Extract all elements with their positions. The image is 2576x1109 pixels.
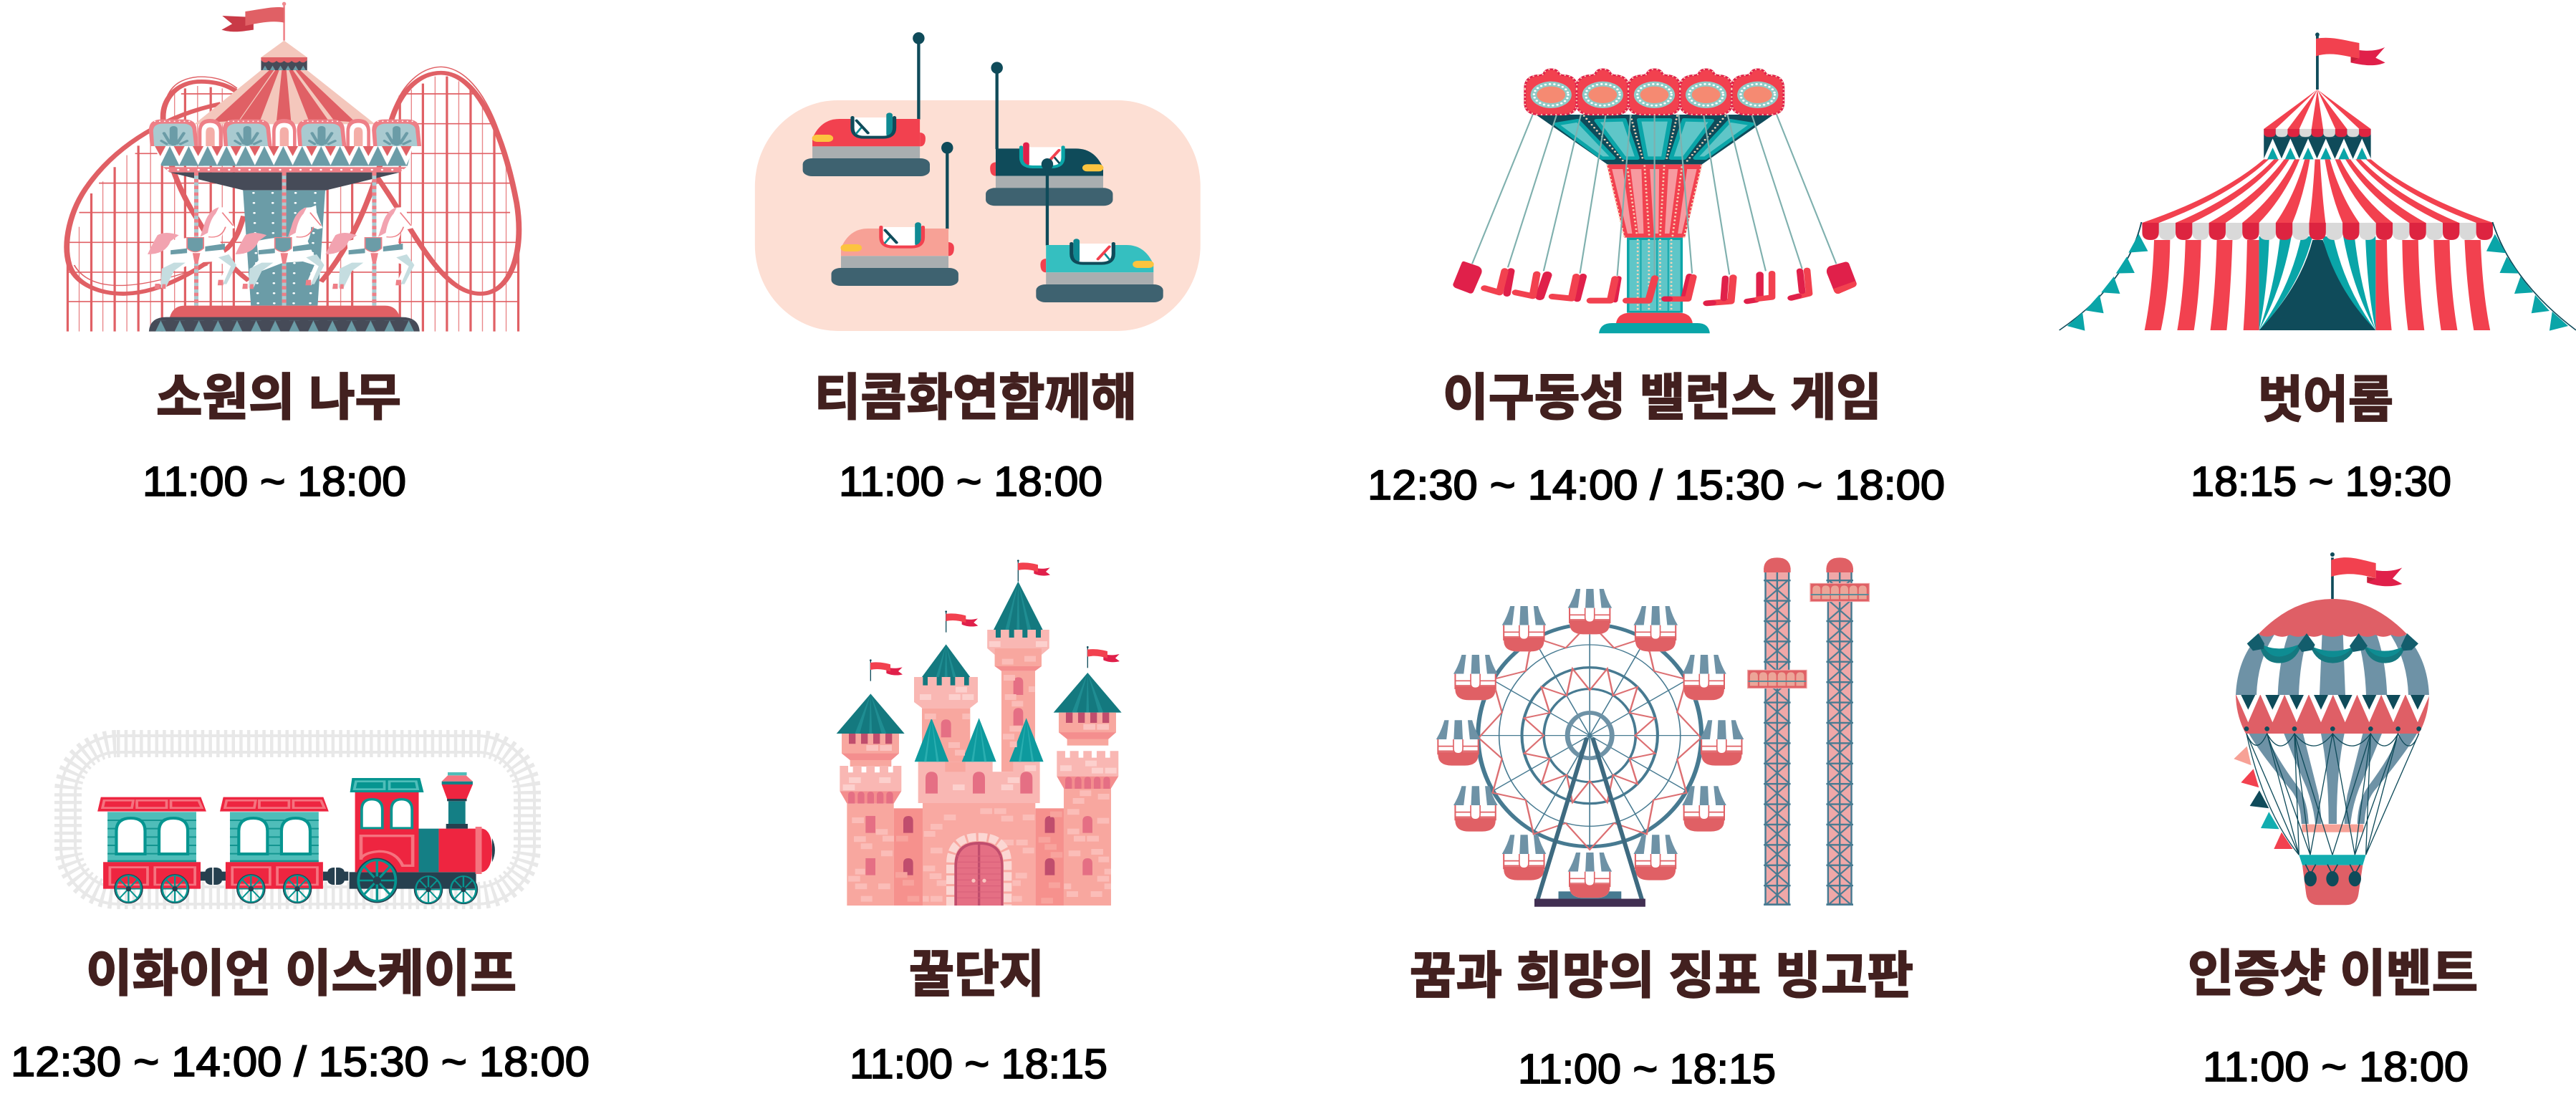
- title: 소원의 나무: 소원의 나무: [156, 370, 401, 426]
- panel: bumper cars: [755, 32, 1201, 505]
- illustration: train on oval track: [61, 736, 534, 904]
- panel: hot air balloon: [2188, 552, 2478, 1090]
- illustration: striped circus tent with bunting: [2060, 32, 2576, 331]
- time: 11:00 ~ 18:15: 11:00 ~ 18:15: [1518, 1046, 1776, 1093]
- time: 11:00 ~ 18:00: 11:00 ~ 18:00: [143, 459, 406, 505]
- panel: carousel ride: [67, 2, 519, 505]
- title: 이화이언 이스케이프: 이화이언 이스케이프: [86, 946, 516, 1002]
- illustration: hot air balloon: [2234, 552, 2430, 905]
- illustration: bumper cars on peach rink: [755, 32, 1201, 331]
- illustration: carousel and roller coaster: [67, 2, 519, 332]
- panel: swing ride: [1368, 69, 1945, 509]
- time: 11:00 ~ 18:00: 11:00 ~ 18:00: [839, 459, 1102, 505]
- time: 11:00 ~ 18:00: 11:00 ~ 18:00: [2203, 1044, 2469, 1090]
- illustration: chain swing ride: [1453, 69, 1857, 333]
- title: 꿈과 희망의 징표 빙고판: 꿈과 희망의 징표 빙고판: [1410, 948, 1913, 1004]
- illustration: drop towers: [1748, 557, 1869, 906]
- title: 인증샷 이벤트: 인증샷 이벤트: [2188, 946, 2478, 1002]
- title: 티콤화연함께해: 티콤화연함께해: [814, 370, 1137, 426]
- illustration: pink castle with flags: [837, 560, 1122, 906]
- panel: ferris wheel and drop towers: [1410, 557, 1913, 1093]
- title: 이구동성 밸런스 게임: 이구동성 밸런스 게임: [1443, 370, 1882, 426]
- panel: train: [11, 736, 590, 1085]
- time: 12:30 ~ 14:00 / 15:30 ~ 18:00: 12:30 ~ 14:00 / 15:30 ~ 18:00: [11, 1039, 590, 1085]
- illustration: ferris wheel: [1436, 589, 1744, 907]
- panel: circus tent: [2060, 32, 2576, 505]
- time: 18:15 ~ 19:30: 18:15 ~ 19:30: [2191, 459, 2451, 505]
- title: 벗어롬: 벗어롬: [2258, 372, 2393, 428]
- title: 꿀단지: 꿀단지: [909, 946, 1044, 1002]
- time: 12:30 ~ 14:00 / 15:30 ~ 18:00: 12:30 ~ 14:00 / 15:30 ~ 18:00: [1368, 462, 1945, 509]
- panel: castle: [837, 560, 1122, 1088]
- time: 11:00 ~ 18:15: 11:00 ~ 18:15: [850, 1041, 1107, 1088]
